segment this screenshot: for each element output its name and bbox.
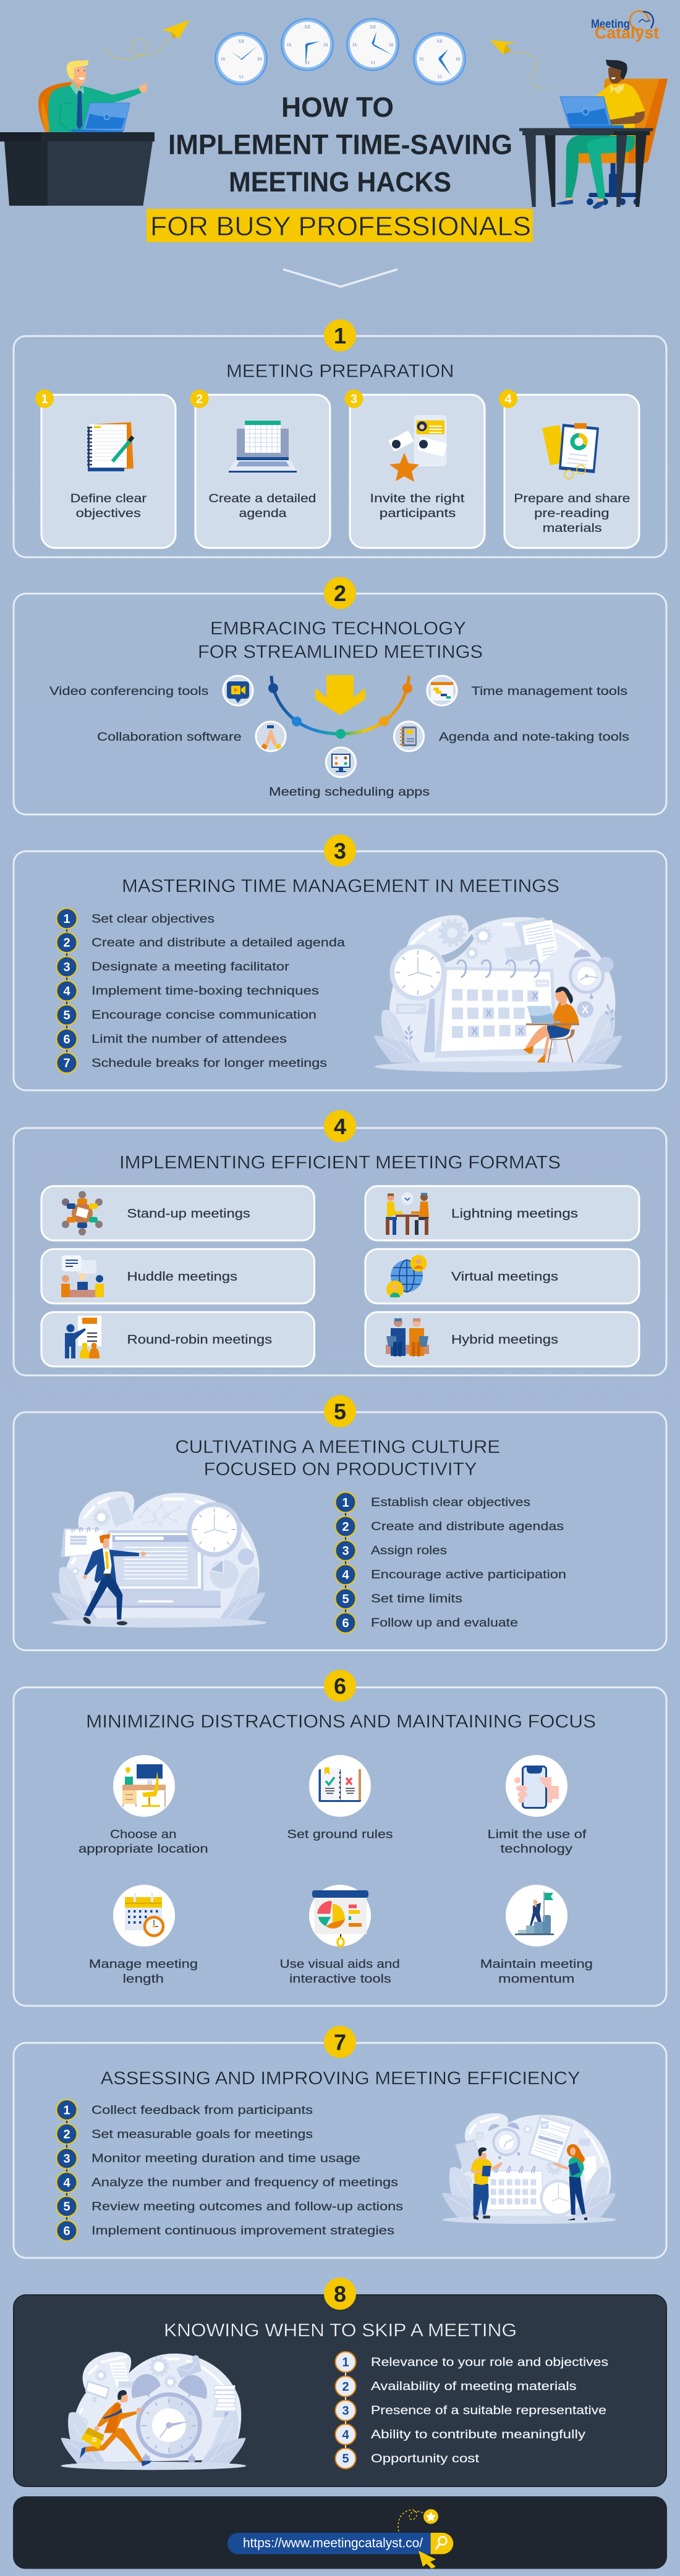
section 3: mastering time management (14, 835, 666, 1090)
numbered list: 1 (63, 912, 70, 926)
icon: clock 4: VI (437, 75, 442, 80)
label (480, 1958, 593, 1986)
label: Limit the use of (487, 1829, 587, 1842)
badge 7 (324, 2026, 356, 2058)
icon: clock 2: III (324, 43, 328, 48)
label: Hybrid meetings (451, 1333, 558, 1347)
badge 8 (324, 2278, 356, 2310)
illustration: woman with calendar and clocks: X (472, 1027, 478, 1037)
card: invite the right participants (344, 389, 485, 548)
card: prepare and share pre-reading materials: 4 (504, 393, 512, 406)
item: agenda and note-taking tools: Agenda and note-taking tools (439, 731, 629, 744)
numbered list: 6 (342, 1617, 349, 1630)
icon: clock 4: III (456, 57, 461, 62)
icon: star badge with dashed trail (398, 2509, 438, 2532)
numbered list (335, 1492, 566, 1633)
section 6: minimizing distractions (14, 1670, 666, 2006)
numbered list: Review meeting outcomes and follow-up actions (91, 2200, 403, 2213)
label (89, 1958, 198, 1986)
section 2: embracing technology (14, 577, 666, 814)
label (514, 492, 630, 535)
item: agenda and note-taking tools (394, 722, 629, 751)
icon: presenter at board (65, 1316, 101, 1358)
illustration: man running past alarm clock (61, 2352, 246, 2470)
item: meeting scheduling apps (269, 747, 430, 799)
illustration: woman with calendar and clocks: X (517, 1027, 524, 1037)
numbered list: 5 (63, 2200, 70, 2214)
illustration: two colleagues with calendar and notes (442, 2113, 616, 2224)
label: length (122, 1973, 164, 1986)
icon: clock 4: XII (436, 39, 443, 44)
item: limit the use of technology (487, 1755, 587, 1856)
item: set ground rules (287, 1755, 393, 1842)
icon: presentation board (312, 1890, 368, 1947)
icon: clock 3 (346, 18, 399, 71)
numbered list: 3 (342, 1544, 349, 1558)
numbered list: 1 (342, 1496, 349, 1510)
icon: person climbing to flag (515, 1892, 554, 1935)
icon: clock 3: III (389, 43, 394, 48)
badge 3 (324, 835, 356, 867)
numbered list: Set measurable goals for meetings (91, 2128, 313, 2141)
label: technology (501, 1843, 573, 1856)
numbered list: Monitor meeting duration and time usage (91, 2152, 360, 2165)
numbered list: Ability to contribute meaningfully (371, 2428, 586, 2441)
card: hybrid meetings (365, 1312, 639, 1366)
label: Set ground rules (287, 1829, 393, 1842)
numbered list: 6 (63, 2225, 70, 2238)
icon: clock 1 (215, 32, 268, 85)
label (70, 492, 147, 520)
badge 5: 5 (334, 1399, 346, 1425)
icon: desk with computer (122, 1764, 166, 1807)
numbered list: 2 (342, 1520, 349, 1534)
label: Maintain meeting (480, 1958, 593, 1971)
numbered list: Implement continuous improvement strategies (91, 2225, 394, 2237)
section 4: implementing efficient meeting formats (14, 1110, 666, 1375)
numbered list: Set clear objectives (91, 913, 215, 925)
illustration: woman with calendar and clocks (374, 915, 623, 1072)
title: HOW TO (281, 91, 394, 123)
label: Virtual meetings (451, 1270, 558, 1284)
label (79, 1829, 208, 1856)
icon: huddle group with speech bubbles (61, 1255, 104, 1297)
heading: MASTERING TIME MANAGEMENT IN MEETINGS (122, 876, 559, 896)
badge 1 (324, 319, 356, 351)
label: Choose an (110, 1829, 177, 1842)
icon: clock 2: XII (304, 25, 311, 30)
numbered list: Create and distribute agendas (371, 1520, 564, 1533)
label: materials (543, 522, 602, 535)
heading: EMBRACING TECHNOLOGY (210, 618, 466, 639)
item: collaboration software: Collaboration software (97, 731, 242, 744)
illustration: woman with calendar and clocks: X (486, 1009, 493, 1019)
card: huddle meetings (41, 1249, 314, 1303)
numbered list (57, 2100, 403, 2241)
label: Define clear (70, 492, 147, 505)
icon: clipboard report (542, 423, 599, 479)
card: lightning meetings (365, 1186, 639, 1240)
label: Prepare and share (514, 492, 630, 505)
label: momentum (498, 1973, 575, 1986)
item: manage meeting length (89, 1885, 198, 1986)
icon: notebook and pen (87, 422, 134, 471)
icon: clock 3: XII (370, 25, 376, 30)
icon: two people at table (386, 1192, 429, 1235)
icon: clock 1: III (257, 57, 262, 62)
numbered list: Schedule breaks for longer meetings (91, 1057, 327, 1070)
heading: ASSESSING AND IMPROVING MEETING EFFICIENCY (101, 2068, 580, 2089)
badge 8: 8 (334, 2281, 346, 2307)
card: invite the right participants: 3 (351, 393, 357, 406)
label: objectives (76, 507, 141, 520)
icon: laptop with schedule (229, 421, 297, 473)
numbered list: 3 (63, 961, 70, 974)
heading (198, 618, 483, 662)
numbered list: 4 (342, 2428, 349, 2442)
card: virtual meetings (365, 1249, 639, 1303)
label: agenda (239, 507, 287, 520)
footer (13, 2496, 667, 2569)
subtitle banner: FOR BUSY PROFESSIONALS (150, 211, 531, 242)
icon: two seated people with laptops (386, 1318, 429, 1357)
badge 4 (324, 1110, 356, 1142)
badge 2 (324, 577, 356, 609)
icon: contact cards and star (388, 415, 447, 482)
numbered list: 3 (63, 2152, 70, 2166)
icon: calendar with clock (125, 1894, 163, 1936)
label: Manage meeting (89, 1958, 198, 1971)
numbered list: Opportunity cost (371, 2452, 480, 2465)
title: MEETING HACKS (229, 166, 451, 198)
heading: CULTIVATING A MEETING CULTURE (175, 1437, 500, 1457)
label: Use visual aids and (279, 1958, 400, 1971)
item: meeting scheduling apps: Meeting scheduling apps (269, 786, 430, 799)
numbered list: Encourage concise communication (91, 1009, 317, 1022)
numbered list: Availability of meeting materials (371, 2380, 576, 2393)
title (168, 91, 512, 198)
card: round-robin meetings (41, 1312, 314, 1366)
section 5: cultivating a meeting culture (14, 1395, 666, 1651)
heading: FOCUSED ON PRODUCTIVITY (204, 1459, 477, 1480)
numbered list: 3 (342, 2404, 349, 2418)
icon: clock 1: VI (239, 75, 244, 80)
badge 3: 3 (334, 838, 346, 864)
label: Stand-up meetings (127, 1207, 250, 1221)
numbered list: Analyze the number and frequency of meetings (91, 2176, 398, 2189)
header (0, 11, 668, 287)
numbered list: Establish clear objectives (371, 1496, 530, 1509)
icon: right paper plane with trail (490, 40, 547, 88)
card: prepare and share pre-reading materials (499, 389, 639, 548)
item: collaboration software (97, 722, 286, 751)
numbered list: 6 (63, 1033, 70, 1046)
heading: KNOWING WHEN TO SKIP A MEETING (164, 2320, 517, 2341)
numbered list: Assign roles (371, 1544, 447, 1557)
icon: clock 1: XII (238, 39, 245, 44)
numbered list: Designate a meeting facilitator (91, 961, 290, 974)
label: participants (380, 507, 456, 520)
arrow: big yellow down (315, 675, 365, 715)
illustration: man at desk pointing (0, 60, 155, 206)
logo: Catalyst (595, 23, 659, 42)
numbered list: Follow up and evaluate (371, 1617, 518, 1630)
item: choose an appropriate location (79, 1755, 208, 1856)
card: define clear objectives: 1 (41, 393, 48, 406)
icon: clock 4 (413, 32, 466, 85)
card: create a detailed agenda (190, 389, 330, 548)
heading: MINIMIZING DISTRACTIONS AND MAINTAINING FOCUS (86, 1711, 596, 1732)
label (208, 492, 316, 520)
illustration: man at table with laptop (519, 60, 668, 209)
icon: clock 3: IX (352, 43, 357, 48)
illustration: man pointing at screen (51, 1491, 266, 1628)
icon: clock 2: IX (287, 43, 292, 48)
item: time management tools: Time management tools (471, 685, 627, 698)
label: Invite the right (370, 492, 465, 505)
badge 5 (324, 1395, 356, 1427)
numbered list: Encourage active participation (371, 1568, 566, 1581)
label (279, 1958, 400, 1986)
url search bar (227, 2533, 453, 2554)
label: pre-reading (534, 507, 610, 520)
numbered list: 2 (342, 2380, 349, 2394)
icon: globe with avatars (386, 1255, 427, 1298)
heading (175, 1437, 500, 1480)
numbered list: 5 (342, 1593, 349, 1606)
icon: clock 3: VI (370, 61, 375, 65)
icon: circle of people (62, 1191, 103, 1235)
numbered list: 4 (63, 2176, 70, 2190)
numbered list: Implement time-boxing techniques (91, 985, 319, 998)
logo: Meeting (591, 18, 630, 31)
item: time management tools (427, 676, 627, 705)
heading: FOR STREAMLINED MEETINGS (198, 642, 483, 662)
label: Huddle meetings (127, 1270, 237, 1284)
section 8: knowing when to skip a meeting (14, 2278, 666, 2486)
numbered list: 5 (342, 2452, 349, 2466)
numbered list: Set time limits (371, 1593, 462, 1606)
section 7: assessing and improving meeting efficiency (14, 2026, 666, 2258)
label: Lightning meetings (451, 1207, 578, 1221)
item: use visual aids and interactive tools (279, 1885, 400, 1986)
label: interactive tools (289, 1973, 391, 1986)
numbered list: 1 (342, 2356, 349, 2370)
card: stand-up meetings (41, 1186, 314, 1240)
badge 7: 7 (334, 2030, 346, 2055)
numbered list: Collect feedback from participants (91, 2104, 313, 2117)
badge 1: 1 (334, 323, 346, 348)
numbered list: 2 (63, 937, 70, 950)
illustration: woman with calendar and clocks: X (582, 1003, 589, 1016)
numbered list: 4 (63, 985, 70, 998)
icon: left paper plane with trail (105, 20, 190, 59)
chart: arc with nodes (268, 676, 412, 739)
numbered list: 5 (63, 1009, 70, 1022)
heading: MEETING PREPARATION (226, 361, 454, 382)
badge 6 (324, 1670, 356, 1702)
item: maintain meeting momentum (480, 1885, 593, 1986)
card: define clear objectives (35, 389, 176, 548)
badge 2: 2 (334, 581, 346, 606)
section 1: meeting preparation (14, 319, 666, 557)
icon: hand holding phone (514, 1766, 559, 1808)
item: video conferencing tools (49, 676, 253, 705)
icon: clock 2: VI (305, 61, 310, 65)
url search bar: https://www.meetingcatalyst.co/ (243, 2536, 423, 2551)
item: video conferencing tools: Video conferencing tools (49, 685, 208, 698)
badge 4: 4 (334, 1114, 346, 1139)
numbered list: 1 (63, 2104, 70, 2118)
chevron arrow (283, 269, 397, 287)
badge 6: 6 (334, 1673, 346, 1699)
icon: clock 4: IX (419, 57, 424, 62)
card: create a detailed agenda: 2 (196, 393, 203, 406)
numbered list: 4 (342, 1568, 349, 1582)
icon: rule book (319, 1767, 361, 1802)
numbered list: Limit the number of attendees (91, 1033, 287, 1046)
label (487, 1829, 587, 1856)
numbered list: Create and distribute a detailed agenda (91, 937, 346, 949)
icon: clock 1: IX (221, 57, 226, 62)
numbered list: Relevance to your role and objectives (371, 2356, 608, 2369)
logo (591, 11, 659, 42)
label: Round-robin meetings (127, 1333, 272, 1347)
heading: IMPLEMENTING EFFICIENT MEETING FORMATS (119, 1153, 561, 1172)
icon: cursor arrow (419, 2551, 436, 2569)
numbered list (335, 2352, 608, 2469)
numbered list: 2 (63, 2128, 70, 2141)
illustration: woman with calendar and clocks: X (532, 991, 538, 1002)
label: appropriate location (79, 1843, 208, 1856)
title: IMPLEMENT TIME-SAVING (168, 128, 512, 161)
numbered list: 7 (63, 1057, 70, 1071)
icon: clock 2 (281, 18, 334, 71)
label (370, 492, 465, 520)
label: Create a detailed (208, 492, 316, 505)
numbered list (57, 908, 346, 1073)
numbered list: Presence of a suitable representative (371, 2404, 606, 2417)
